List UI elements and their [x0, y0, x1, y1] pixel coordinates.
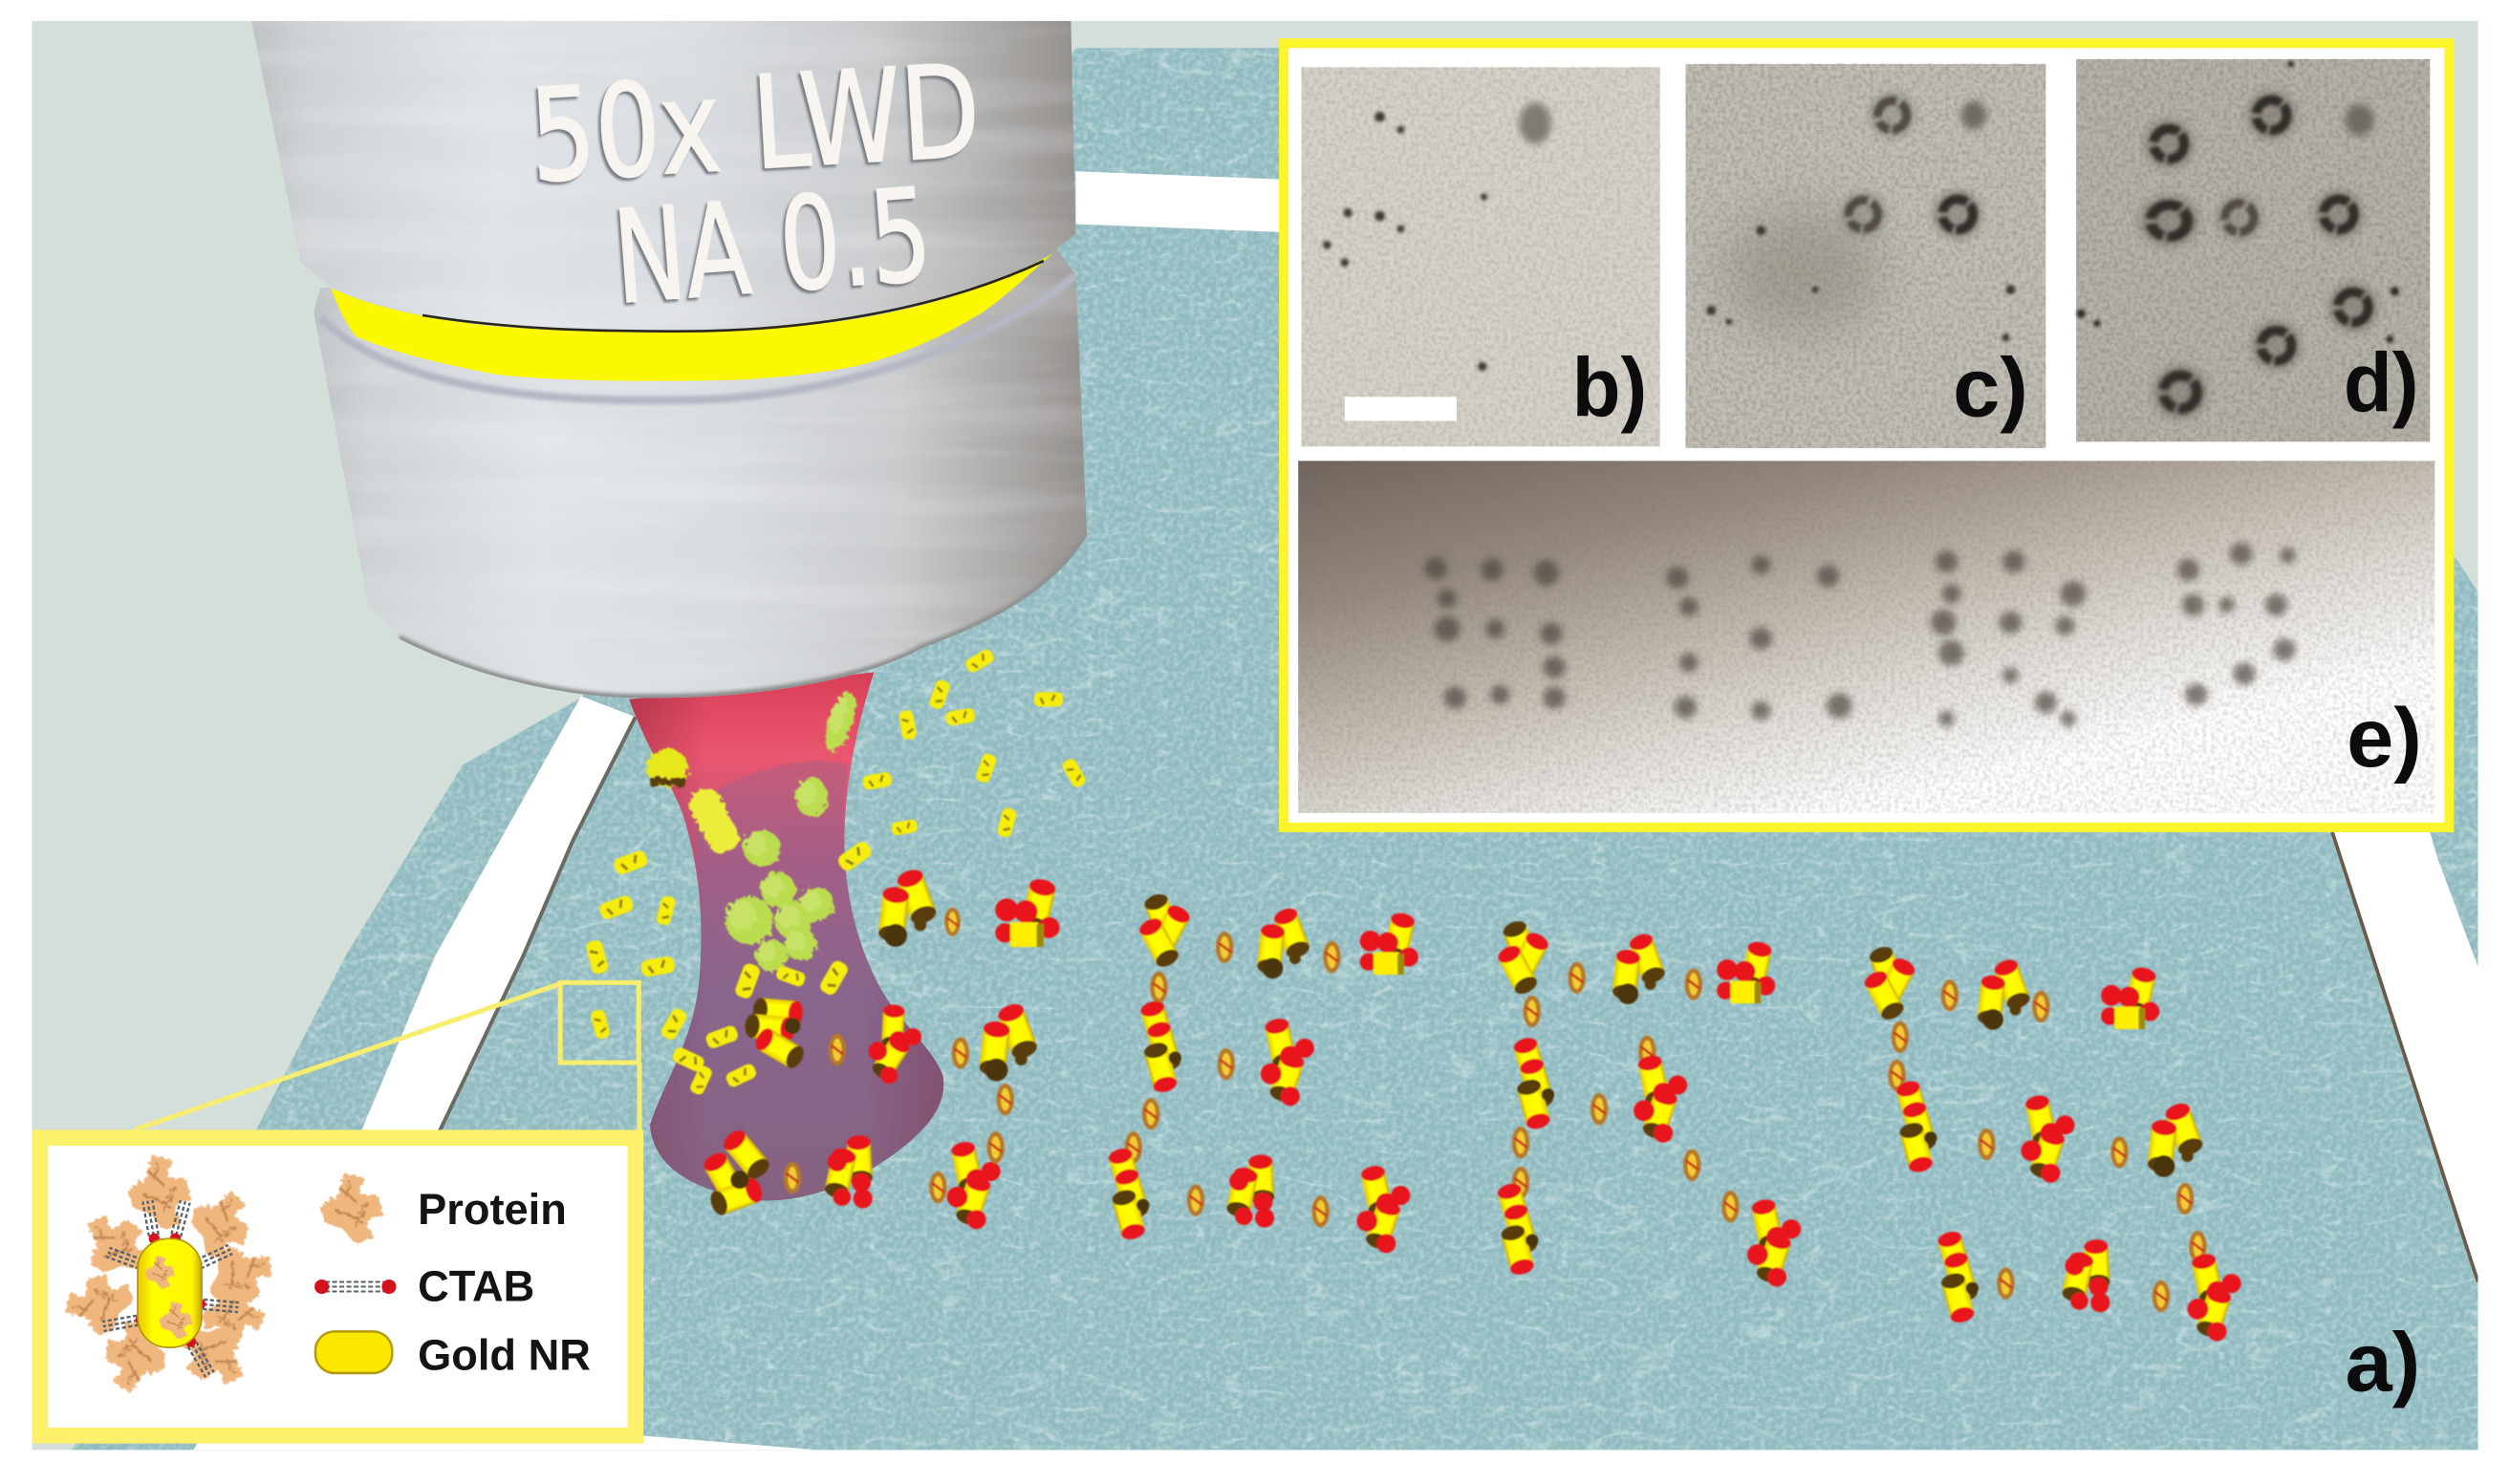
panel b micrograph [1302, 67, 1660, 446]
proteins and nanorods inside the beam [647, 688, 861, 972]
yellow objective ring [332, 253, 1053, 381]
panel d micrograph [2076, 59, 2430, 441]
panel b label: b) [1572, 341, 1647, 434]
label: Gold NR: Gold NR [418, 1331, 591, 1380]
legend inset [40, 1138, 636, 1435]
objective upper barrel [240, 21, 1089, 341]
microscope objective lens [240, 21, 1096, 704]
icon: gold nanorod [315, 1331, 392, 1373]
nanorod pattern: letter S [701, 867, 1060, 1229]
panel d label: d) [2344, 336, 2419, 429]
white stripes around the substrate [194, 171, 2478, 1450]
zoom box and leader lines to legend [135, 982, 639, 1129]
falling yellow nanoparticles [585, 648, 1088, 1096]
panel c label: c) [1953, 341, 2028, 434]
nanorod pattern: letter E [1107, 892, 1418, 1253]
objective label: NA 0.5: NA 0.5 [609, 161, 937, 333]
label: CTAB: CTAB [418, 1262, 534, 1311]
panel e micrograph [1298, 461, 2434, 813]
scale bar [1345, 397, 1457, 420]
laser beam and droplet [629, 672, 943, 1200]
panel a label: a) [2346, 1316, 2420, 1409]
panel c micrograph [1686, 64, 2045, 448]
label: Protein: Protein [418, 1185, 567, 1234]
nanorod pattern: letter R [1495, 918, 1801, 1286]
icon: functionalized nanorod with proteins [65, 1155, 282, 1402]
objective label: 50x LWD: 50x LWD [527, 36, 984, 211]
objective lower barrel [304, 240, 1096, 704]
nanorod pattern: second letter S [1862, 944, 2241, 1341]
micrograph inset frame [1284, 43, 2449, 828]
icon: CTAB molecule [314, 1280, 396, 1294]
panel e label: e) [2347, 692, 2422, 785]
icon: protein [319, 1172, 382, 1243]
